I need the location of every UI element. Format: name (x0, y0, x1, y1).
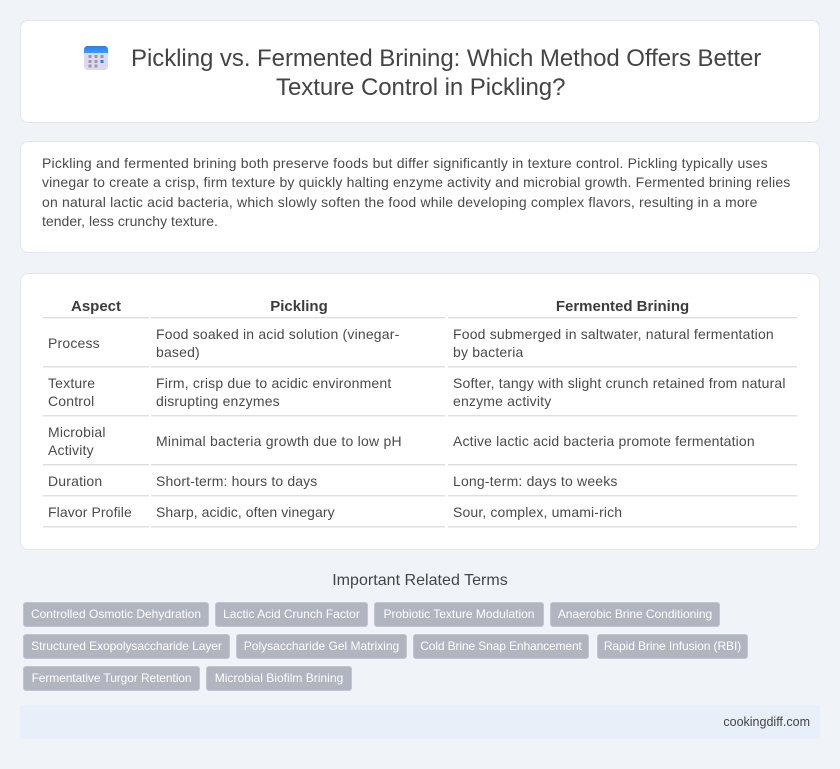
row: microbial activity: Activity (48, 442, 94, 458)
row: texture control (48, 375, 786, 409)
table header (71, 298, 689, 315)
row: flavor profile: Sour, complex, umami-rich (453, 504, 622, 520)
heading: main title: Texture Control in Pickling? (276, 74, 565, 101)
row: process: Process (48, 335, 100, 351)
heading: main title (131, 45, 761, 101)
icon: calendar grid (84, 46, 108, 70)
row: flavor profile: Sharp, acidic, often vinegary (156, 504, 335, 520)
footer bar (20, 705, 820, 739)
text block: introduction: vinegar to create a crisp, firm texture by quickly halting enzyme activity and microbial growth. Fermented brining relies (42, 174, 790, 190)
heading: related terms: Important Related Terms (332, 572, 508, 589)
text block: introduction: on natural lactic acid bacteria, which slowly soften the food while developing complex flavors, resulting in a more (42, 194, 758, 210)
heading: main title: Pickling vs. Fermented Brining: Which Method Offers Better (131, 45, 761, 72)
table header: Aspect (71, 298, 121, 315)
tag group: related terms: Probiotic Texture Modulation (384, 607, 534, 621)
tag group: related terms: Lactic Acid Crunch Factor (223, 607, 360, 621)
table header: Pickling (270, 298, 328, 315)
tag group: related terms: Cold Brine Snap Enhancement (420, 639, 582, 653)
row: duration: Duration (48, 473, 102, 489)
row: texture control: enzyme activity (453, 393, 551, 409)
row: process: by bacteria (453, 344, 523, 360)
row: texture control: Firm, crisp due to acidic environment (156, 375, 391, 391)
text block: introduction: Pickling and fermented brining both preserve foods but differ significantly in texture control. Pickling typically uses (42, 155, 768, 171)
text block: introduction (42, 155, 790, 229)
panel: comparison table (20, 273, 820, 550)
row: texture control: Control (48, 393, 94, 409)
row: process: based) (156, 344, 200, 360)
tag group: related terms: Polysaccharide Gel Matrixing (244, 639, 399, 653)
row: process: Food soaked in acid solution (vinegar- (156, 326, 399, 342)
row: microbial activity: Active lactic acid bacteria promote fermentation (453, 433, 755, 449)
tag group: related terms: Microbial Biofilm Brining (215, 671, 343, 685)
row: duration (48, 473, 618, 489)
row: flavor profile (48, 504, 622, 520)
comparison table (43, 298, 797, 528)
row: texture control: disrupting enzymes (156, 393, 280, 409)
row: process (48, 326, 774, 360)
row: flavor profile: Flavor Profile (48, 504, 132, 520)
tag group: related terms: Rapid Brine Infusion (RBI) (604, 639, 741, 653)
row: microbial activity (48, 424, 755, 458)
footer source text: cookingdiff.com (723, 715, 810, 729)
row: microbial activity: Microbial (48, 424, 106, 440)
tag group: related terms (23, 602, 748, 691)
table header: Fermented Brining (556, 298, 689, 315)
text block: introduction: tender, less crunchy texture. (42, 213, 218, 229)
title card (20, 20, 820, 123)
row: texture control: Softer, tangy with slight crunch retained from natural (453, 375, 786, 391)
row: microbial activity: Minimal bacteria growth due to low pH (156, 433, 402, 449)
panel: introduction (20, 141, 820, 253)
tag group: related terms: Structured Exopolysaccharide Layer (31, 639, 222, 653)
row: duration: Long-term: days to weeks (453, 473, 618, 489)
row: process: Food submerged in saltwater, natural fermentation (453, 326, 774, 342)
row: duration: Short-term: hours to days (156, 473, 317, 489)
tag group: related terms: Fermentative Turgor Retention (32, 671, 191, 685)
tag group: related terms: Anaerobic Brine Conditioning (558, 607, 712, 621)
tag group: related terms: Controlled Osmotic Dehydration (31, 607, 201, 621)
row: texture control: Texture (48, 375, 95, 391)
